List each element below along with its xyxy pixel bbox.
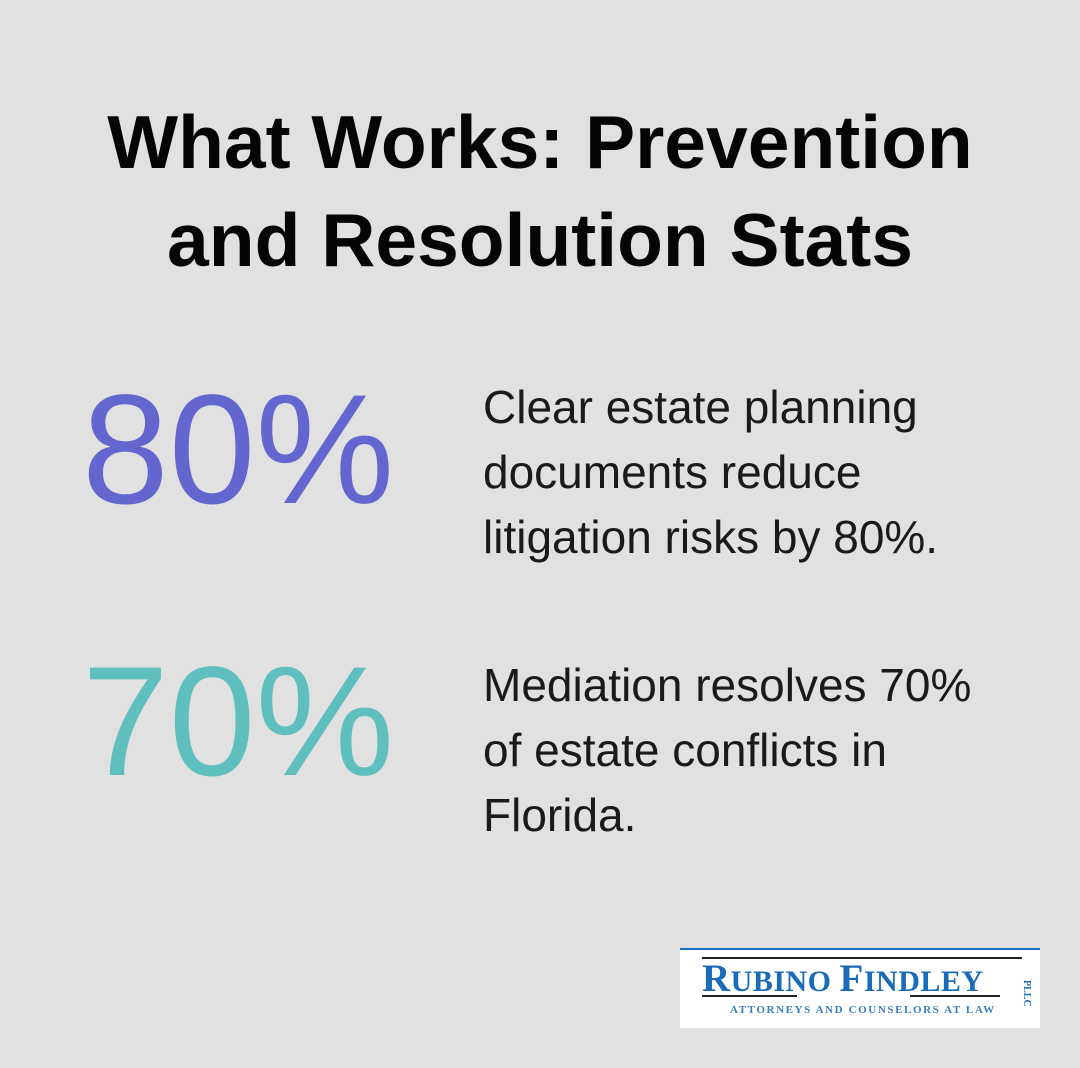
logo: RUBINO FINDLEY <box>702 957 984 1000</box>
text: 70% description: Mediation resolves 70% <box>483 659 971 711</box>
text: 70% description: of estate conflicts in <box>483 724 887 776</box>
text: 80% description: documents reduce <box>483 446 861 498</box>
title: What Works: Prevention <box>107 100 973 184</box>
text: 80% description: Clear estate planning <box>483 381 918 433</box>
title <box>107 100 973 282</box>
stat: 70%: 70% <box>82 635 394 809</box>
text: 70% description <box>483 659 971 841</box>
text: 80% description: litigation risks by 80%. <box>483 511 938 563</box>
stat: 80%: 80% <box>82 363 394 537</box>
text: 70% description: Florida. <box>483 789 636 841</box>
title: and Resolution Stats <box>167 198 913 282</box>
text: 80% description <box>483 381 938 563</box>
logo <box>680 948 1040 1028</box>
logo: ATTORNEYS AND COUNSELORS AT LAW <box>730 1004 996 1016</box>
logo: PLLC <box>1021 980 1032 1007</box>
